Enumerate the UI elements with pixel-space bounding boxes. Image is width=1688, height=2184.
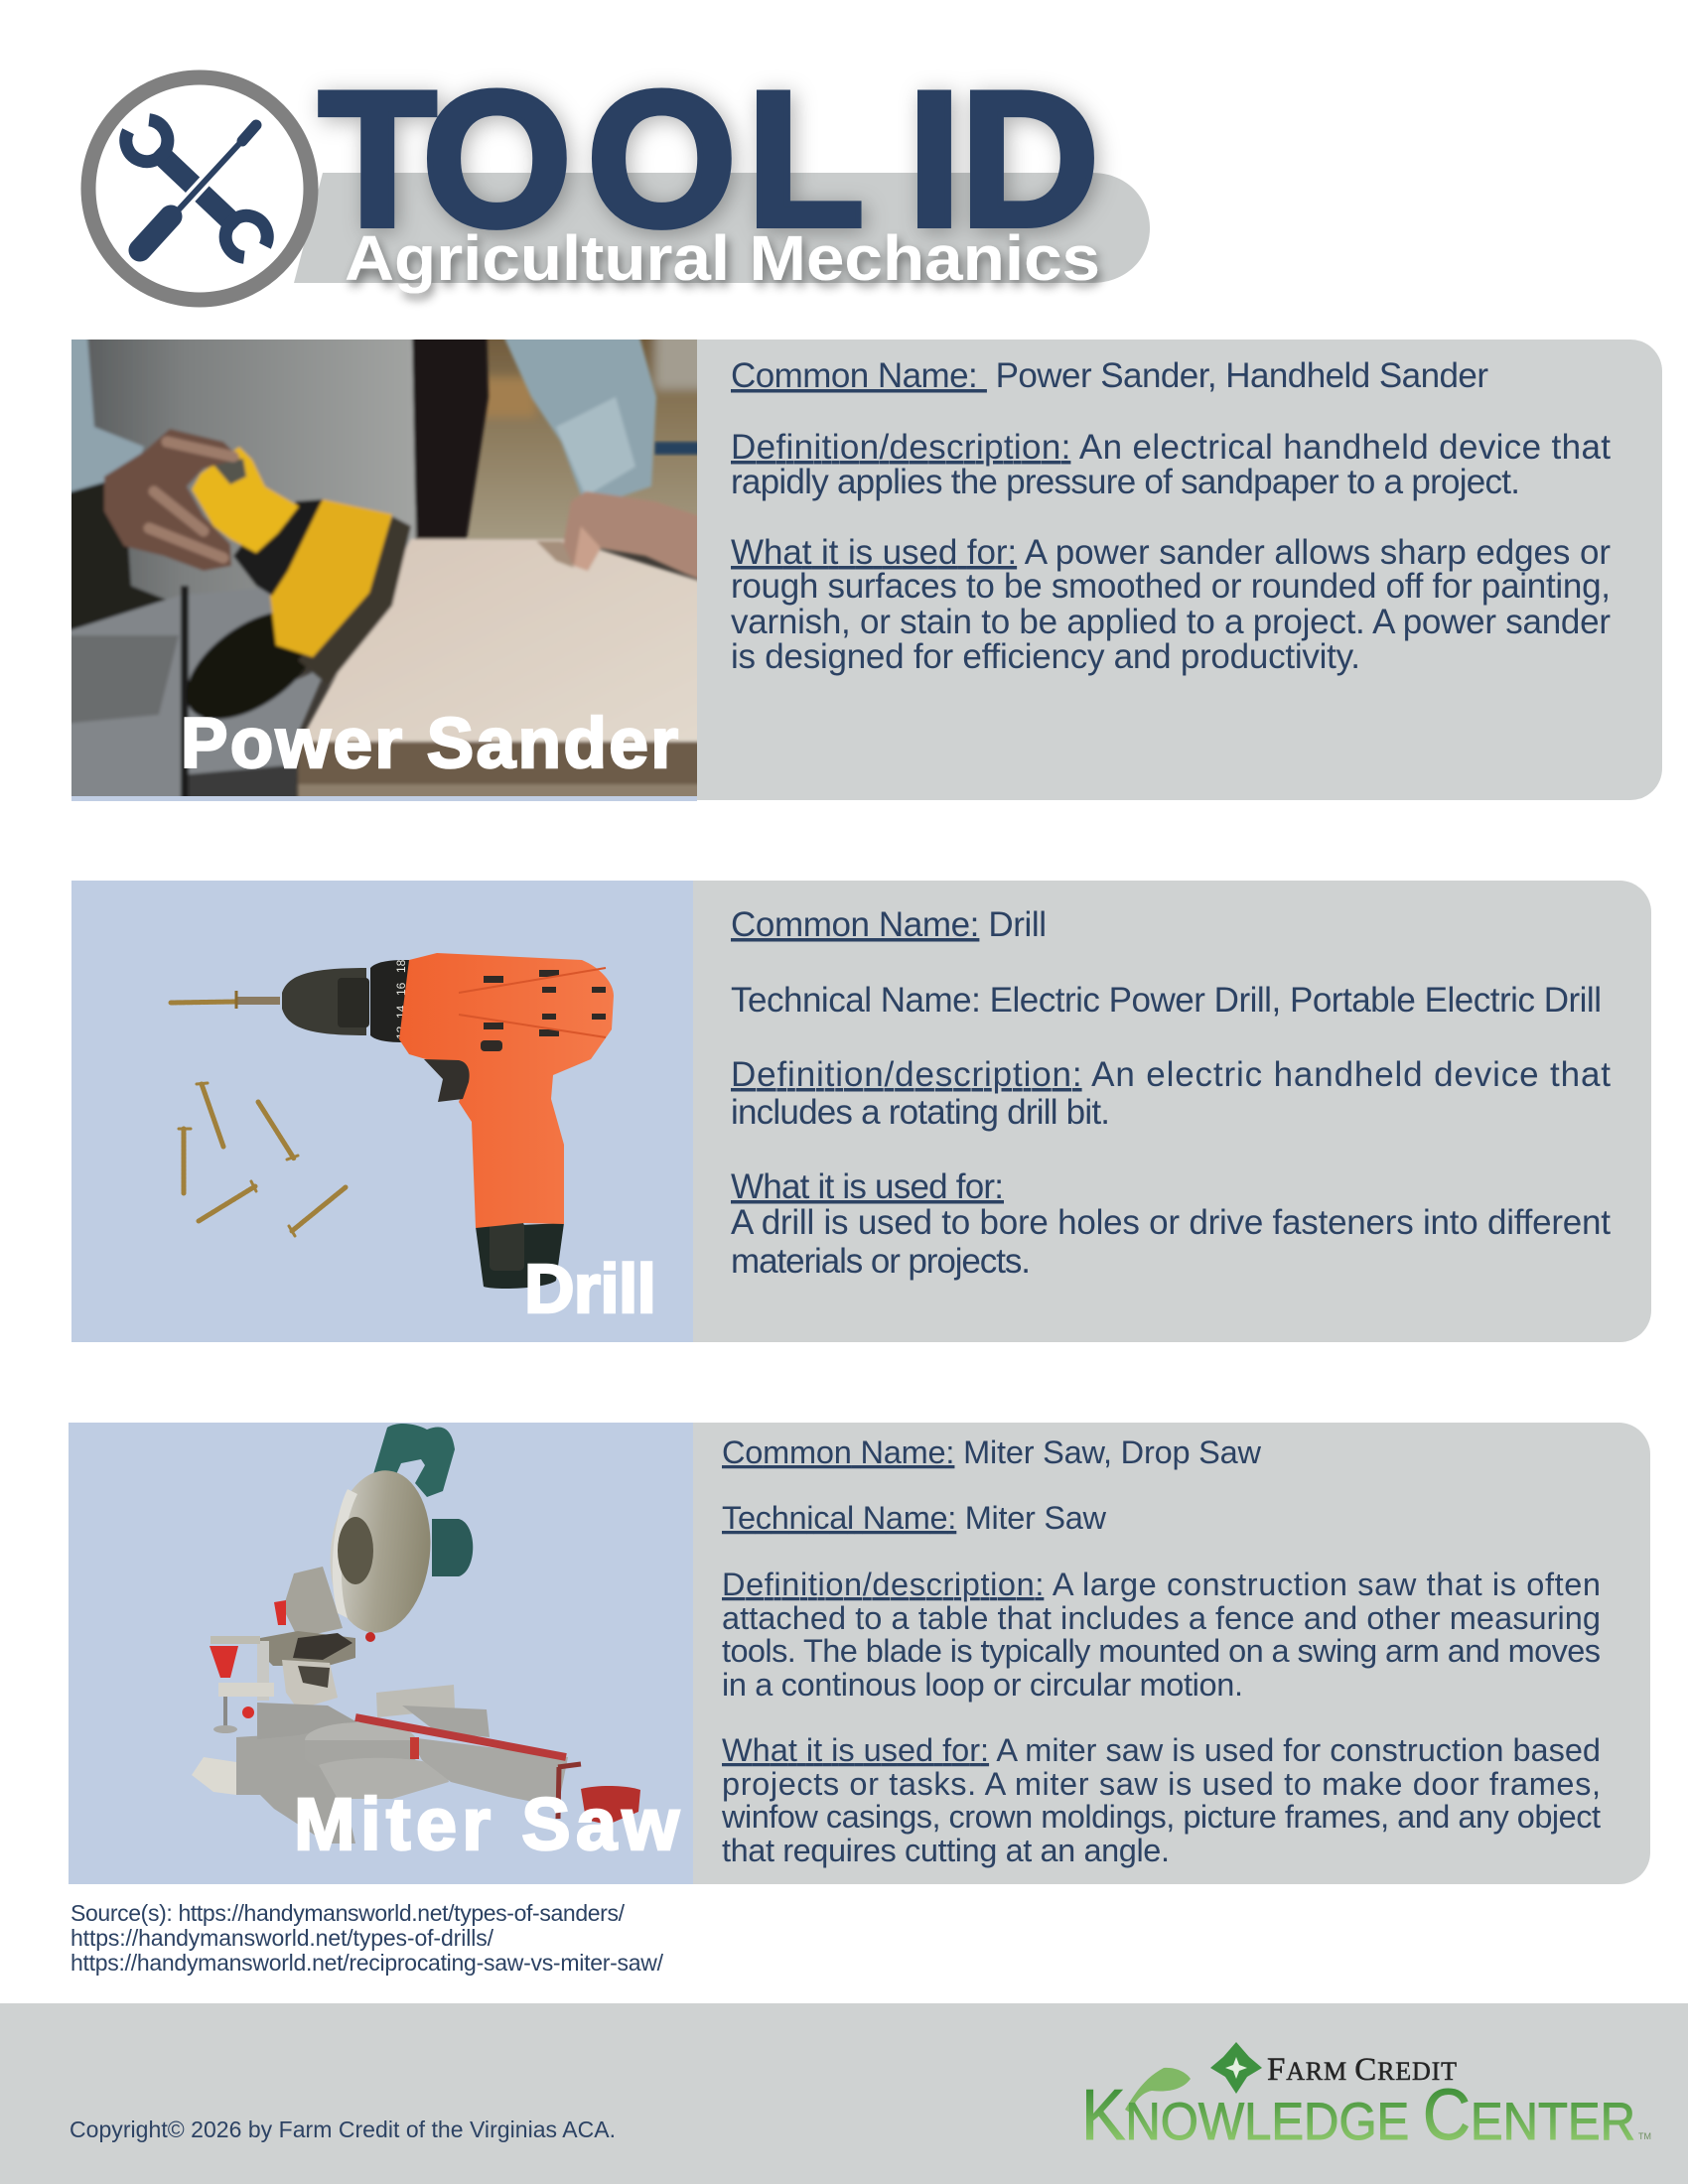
left foot bbox=[192, 1757, 236, 1795]
scale bbox=[319, 1758, 449, 1799]
bit bbox=[236, 997, 280, 1005]
icon: badge ring bbox=[88, 77, 311, 300]
chuck bbox=[282, 968, 366, 1035]
fence bbox=[257, 1703, 357, 1739]
sources: Source(s): https://handymansworld.net/types-of-sanders/ bbox=[70, 1900, 626, 1926]
collar numerals: 14 bbox=[394, 1005, 408, 1019]
panel background bbox=[655, 1423, 1650, 1884]
copyright: Copyright© 2026 by Farm Credit of the Virginias ACA. bbox=[70, 2116, 616, 2142]
image background bbox=[69, 1423, 693, 1884]
label: Power Sander: Power Sander bbox=[181, 705, 678, 783]
collar numerals: 12 bbox=[394, 1025, 408, 1039]
sources bbox=[70, 1900, 664, 1976]
right block bbox=[402, 1706, 490, 1737]
saw handle bbox=[370, 1424, 455, 1497]
text block: miter saw details: attached to a table that includes a fence and other measuring bbox=[722, 1600, 1601, 1636]
turntable bbox=[305, 1722, 416, 1758]
collar bbox=[370, 960, 409, 1042]
motor housing bbox=[432, 1519, 473, 1576]
text block: miter saw details bbox=[721, 1434, 1601, 1868]
text block: drill details: Common Name: Drill bbox=[731, 905, 1047, 944]
photo illustration: hands using a power sander bbox=[71, 340, 697, 796]
header: title lockup bbox=[88, 52, 1150, 300]
right clamp bbox=[558, 1764, 581, 1819]
sources: https://handymansworld.net/types-of-drills/ bbox=[70, 1925, 494, 1951]
icon: diamond emblem bbox=[1210, 2042, 1262, 2094]
arm block bbox=[260, 1631, 355, 1666]
base bbox=[236, 1732, 355, 1843]
rod and clamp bbox=[257, 1641, 269, 1701]
text block: drill details: includes a rotating drill bit. bbox=[731, 1093, 1110, 1132]
rail arm bbox=[409, 1737, 568, 1807]
text block: drill details: Technical Name: Electric Power Drill, Portable Electric Drill bbox=[731, 981, 1602, 1020]
text block: power sander details: Common Name: Power Sander, Handheld Sander bbox=[731, 356, 1488, 395]
subtitle: Agricultural Mechanics: Agricultural Mechanics bbox=[345, 222, 1100, 294]
title: TOOL ID: TOOL ID bbox=[319, 52, 1099, 267]
text block: power sander details bbox=[731, 356, 1611, 676]
collar numerals: 18 bbox=[394, 959, 408, 973]
text block: drill details: Definition/description: An electric handheld device that bbox=[731, 1055, 1611, 1094]
footer band bbox=[0, 2003, 1688, 2184]
text block: miter saw details: that requires cutting at an angle. bbox=[722, 1833, 1170, 1868]
text block: miter saw details: tools. The blade is typically mounted on a swing arm and moves bbox=[722, 1633, 1601, 1669]
trademark: TM bbox=[1638, 2131, 1651, 2141]
title band bbox=[294, 173, 1150, 283]
collar numerals bbox=[394, 959, 408, 1039]
icon: leaf bbox=[1125, 2068, 1191, 2113]
text block: miter saw details: Common Name: Miter Saw, Drop Saw bbox=[722, 1434, 1262, 1470]
text block: miter saw details: Definition/description: A large construction saw that is often bbox=[722, 1567, 1601, 1602]
text block: miter saw details: Technical Name: Miter Saw bbox=[722, 1500, 1107, 1536]
label: Miter Saw: Miter Saw bbox=[294, 1783, 679, 1865]
text block: drill details bbox=[731, 905, 1611, 1281]
text block: drill details: What it is used for: bbox=[731, 1167, 1004, 1206]
panel background bbox=[655, 881, 1651, 1342]
screws bbox=[171, 1002, 346, 1236]
trigger bbox=[424, 1059, 470, 1102]
text block: miter saw details: What it is used for: A miter saw is used for construction based bbox=[722, 1732, 1601, 1768]
text block: drill details: materials or projects. bbox=[731, 1242, 1031, 1281]
logo: Farm Credit Knowledge Center bbox=[1081, 2042, 1651, 2155]
panel: drill bbox=[71, 881, 1651, 1342]
drill body bbox=[399, 953, 614, 1228]
footer bbox=[0, 2003, 1688, 2184]
blade guard bbox=[323, 1465, 438, 1638]
drill battery bbox=[476, 1223, 564, 1289]
text block: miter saw details: winfow casings, crown moldings, picture frames, and any object bbox=[721, 1799, 1601, 1835]
Knowledge Center wordmark: KNOWLEDGE CENTER bbox=[1081, 2076, 1635, 2155]
red rail bbox=[355, 1717, 566, 1757]
Farm Credit wordmark: FARM CREDIT bbox=[1267, 2052, 1457, 2088]
text block: power sander details: varnish, or stain to be applied to a project. A power sander bbox=[731, 603, 1611, 641]
neck bbox=[282, 1660, 338, 1709]
panel: power sander bbox=[55, 318, 1662, 814]
blue strip beneath photo bbox=[71, 796, 697, 801]
text block: miter saw details: in a continous loop or circular motion. bbox=[722, 1667, 1243, 1703]
illustration: orange cordless drill with screws bbox=[171, 953, 614, 1289]
sources: https://handymansworld.net/reciprocating-saw-vs-miter-saw/ bbox=[70, 1950, 664, 1976]
bracket bbox=[283, 1567, 343, 1638]
body details bbox=[481, 970, 606, 1051]
text block: miter saw details: projects or tasks. A miter saw is used to make door frames, bbox=[722, 1766, 1601, 1802]
text block: drill details: A drill is used to bore holes or drive fasteners into different bbox=[731, 1203, 1611, 1242]
text block: power sander details: What it is used for: A power sander allows sharp edges or bbox=[731, 533, 1611, 572]
illustration: miter saw bbox=[192, 1424, 640, 1843]
label: Drill: Drill bbox=[524, 1250, 656, 1327]
panel: miter saw bbox=[69, 1423, 1650, 1884]
red knobs bbox=[210, 1646, 238, 1678]
ruler plate bbox=[376, 1685, 455, 1717]
collar numerals: 16 bbox=[394, 982, 408, 996]
text block: power sander details: is designed for efficiency and productivity. bbox=[731, 637, 1360, 676]
text block: power sander details: rapidly applies the pressure of sandpaper to a project. bbox=[731, 463, 1520, 501]
panel background bbox=[655, 340, 1662, 800]
text block: power sander details: Definition/description: An electrical handheld device that bbox=[731, 428, 1611, 467]
text block: power sander details: rough surfaces to be smoothed or rounded off for painting, bbox=[731, 567, 1611, 606]
red handle bbox=[581, 1786, 640, 1825]
image background bbox=[71, 881, 693, 1342]
icon: crossed wrench and screwdriver bbox=[112, 106, 281, 271]
